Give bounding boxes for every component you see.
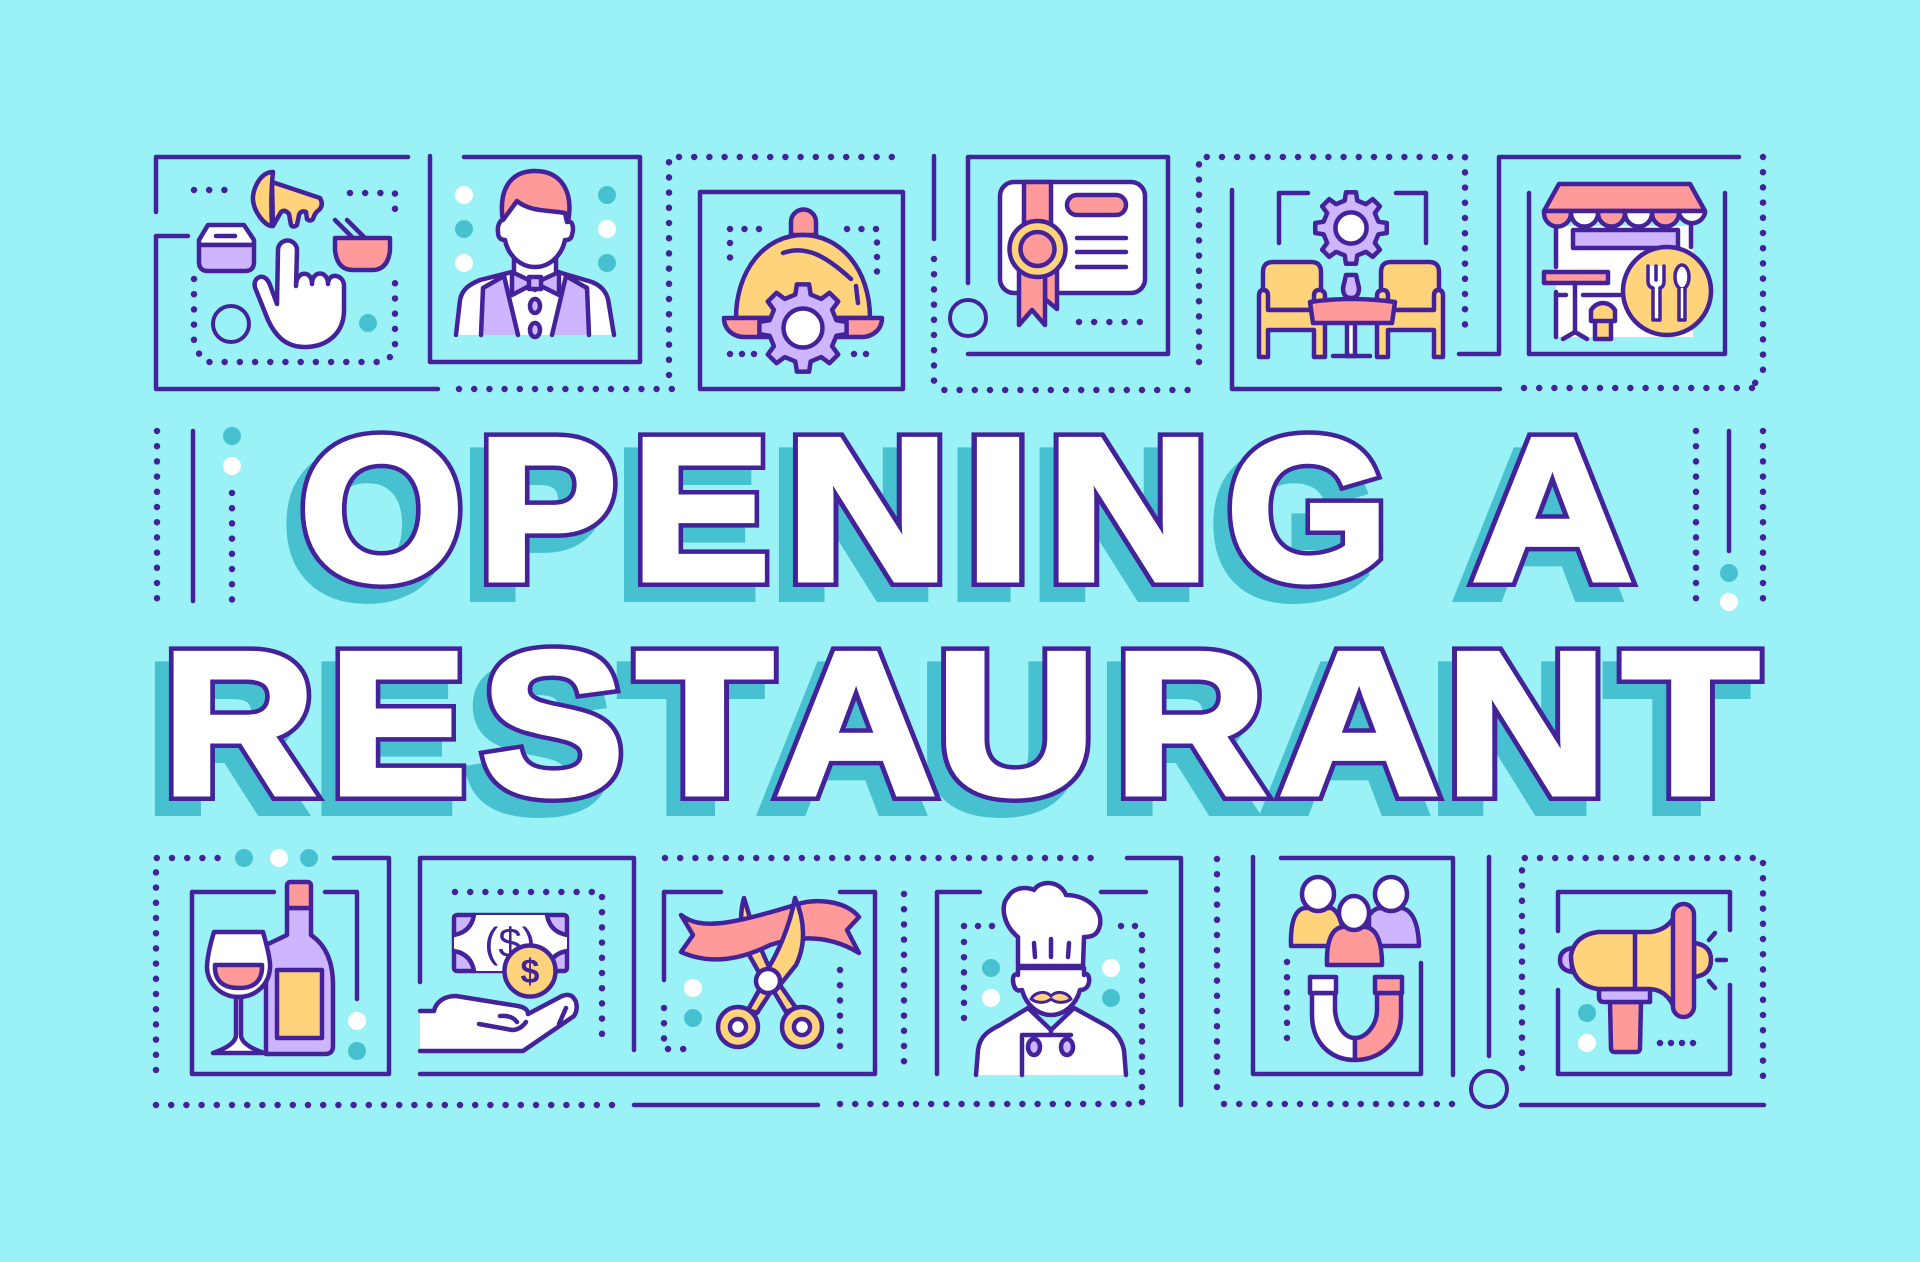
title: N <box>772 412 935 638</box>
title: S <box>482 610 624 838</box>
title: G <box>1226 396 1388 624</box>
icon: magnet <box>1310 977 1402 1060</box>
title: A <box>762 626 922 852</box>
icon: pointing hand <box>255 240 344 347</box>
title: O <box>300 396 464 624</box>
title: R <box>1115 610 1266 838</box>
title: N <box>1431 626 1593 852</box>
panel: waiter <box>430 156 640 362</box>
title: N <box>1047 396 1210 624</box>
panel: restaurant management bell <box>700 192 903 389</box>
panel: restaurant storefront <box>1459 157 1763 388</box>
title: P <box>464 412 603 638</box>
title side decoration left <box>157 427 241 601</box>
icon: table and chairs <box>1259 262 1443 357</box>
panel: chef <box>156 858 1181 1105</box>
title: R <box>163 610 315 838</box>
title: N <box>786 396 949 624</box>
panel: marketing megaphone <box>1471 857 1764 1107</box>
icon: bowl with chopsticks <box>335 220 390 270</box>
title: N <box>1445 610 1607 838</box>
title: T <box>1608 626 1745 852</box>
title: S <box>482 610 624 838</box>
title: A <box>1279 610 1439 838</box>
title: U <box>936 610 1096 838</box>
icon: scissors and ribbon <box>681 898 859 1047</box>
icon: pizza slice <box>253 172 322 226</box>
title: N <box>1033 412 1196 638</box>
title: S <box>468 626 610 852</box>
title: T <box>636 610 773 838</box>
title: O <box>286 412 450 638</box>
label: dollar on banknote: ($) <box>484 919 536 966</box>
title: E <box>329 610 467 838</box>
title: R <box>163 610 315 838</box>
title: T <box>1622 610 1759 838</box>
title: U <box>922 626 1082 852</box>
title: T <box>636 610 773 838</box>
title: E <box>632 396 770 624</box>
panel: money <box>420 858 875 1074</box>
title: P <box>478 396 617 624</box>
title: I <box>964 396 1032 624</box>
title: A <box>1458 412 1619 638</box>
title: A <box>1265 626 1425 852</box>
title: N <box>1445 610 1607 838</box>
title: I <box>950 412 1018 638</box>
title: R <box>1115 610 1266 838</box>
title: U <box>936 610 1096 838</box>
title: A <box>1472 396 1633 624</box>
icon: certificate with rosette <box>1000 182 1145 325</box>
icon: cloche with gear <box>724 210 882 372</box>
title: I <box>964 396 1032 624</box>
title: A <box>776 610 936 838</box>
title: R <box>1101 626 1252 852</box>
panel: ribbon cutting <box>664 858 1102 1062</box>
panel: online food ordering <box>156 157 896 389</box>
title: A <box>1472 396 1633 624</box>
title: R <box>149 626 301 852</box>
title: G <box>1226 396 1388 624</box>
title: N <box>1047 396 1210 624</box>
icon: wine bottle and glass <box>207 882 333 1054</box>
title: E <box>329 610 467 838</box>
title: E <box>315 626 453 852</box>
icon: megaphone <box>1560 904 1726 1052</box>
title: O <box>300 396 464 624</box>
panel: wine <box>156 849 389 1074</box>
title: E <box>632 396 770 624</box>
title: N <box>786 396 949 624</box>
icon: chef figure <box>976 883 1126 1075</box>
icon: gear <box>1315 192 1387 264</box>
title: T <box>1622 610 1759 838</box>
label: dollar on coin: $ <box>521 953 540 991</box>
icon: group of people <box>1291 877 1419 965</box>
title: P <box>478 396 617 624</box>
icon: banknote, coin and hand <box>420 915 577 1051</box>
title: T <box>622 626 759 852</box>
title: G <box>1212 412 1374 638</box>
panel: certificate <box>934 156 1465 390</box>
icon: food box <box>199 225 254 271</box>
title: E <box>618 412 756 638</box>
title <box>149 396 1759 852</box>
icon: storefront <box>1544 184 1711 339</box>
title: A <box>776 610 936 838</box>
panel: restaurant interior <box>1232 190 1500 389</box>
panel: attracting customers <box>1217 857 1453 1104</box>
title side decoration right <box>1696 431 1763 611</box>
title: A <box>1279 610 1439 838</box>
icon: waiter figure <box>456 171 614 337</box>
